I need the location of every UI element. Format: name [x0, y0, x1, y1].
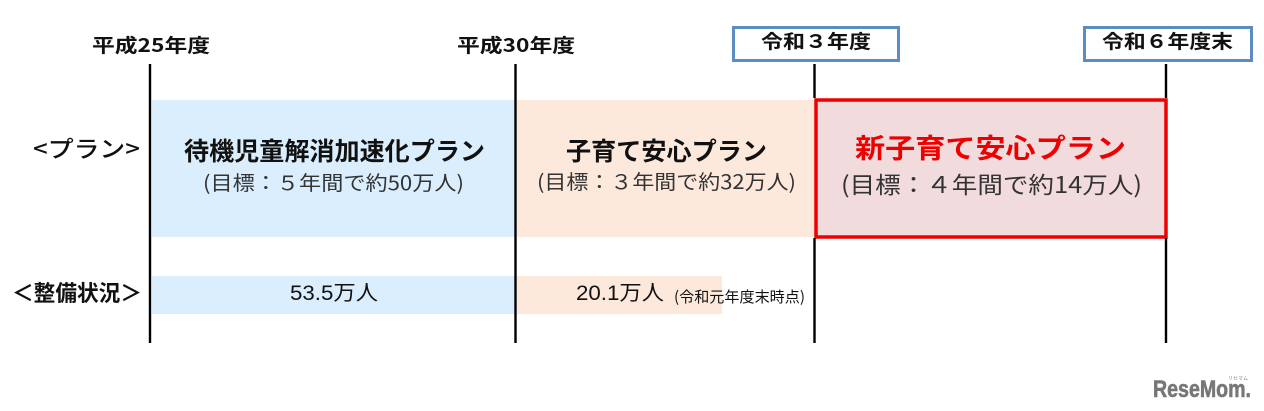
panel: plan band, 待機児童解消加速化プラン — [152, 100, 515, 237]
status bar: 20.1万人 — [517, 276, 722, 314]
plan text: 新子育て安心プラン: (目標：４年間で約14万人) — [841, 166, 1142, 200]
label: 平成30年度: 平成30年度 — [457, 31, 575, 58]
row label: 整備状況: ＜整備状況＞ — [12, 276, 142, 308]
value: 53.5万人: 53.5万人 — [290, 282, 378, 305]
plan text: 待機児童解消加速化プラン — [184, 132, 485, 196]
plan text: 待機児童解消加速化プラン: 待機児童解消加速化プラン — [184, 132, 485, 168]
plan text: 待機児童解消加速化プラン: (目標：５年間で約50万人) — [203, 167, 464, 196]
label box: 令和3年度: 令和３年度 — [761, 27, 871, 54]
value: 20.1万人: 20.1万人 — [576, 282, 664, 305]
panel: plan band, 新子育て安心プラン — [816, 100, 1166, 237]
label box: 令和6年度末: 令和６年度末 — [1102, 27, 1233, 54]
plan text: 新子育て安心プラン — [841, 127, 1142, 200]
plan text: 子育て安心プラン — [537, 132, 796, 195]
plan text: 子育て安心プラン: 子育て安心プラン — [566, 132, 767, 168]
timeline lines — [150, 64, 1166, 343]
status bar: 53.5万人 — [152, 276, 515, 314]
label box: 令和6年度末 — [1084, 27, 1252, 60]
row label: プラン: <プラン> — [33, 130, 140, 164]
panel: plan band, 子育て安心プラン — [517, 100, 815, 237]
plan text: 新子育て安心プラン: 新子育て安心プラン — [855, 127, 1126, 166]
label box: 令和3年度 — [734, 27, 898, 60]
note: 令和元年度末時点: (令和元年度末時点) — [674, 286, 805, 307]
logo: ReseMom: リセマム — [1228, 375, 1248, 382]
plan text: 子育て安心プラン: (目標：３年間で約32万人) — [537, 166, 796, 195]
label: 平成25年度: 平成25年度 — [92, 31, 210, 58]
